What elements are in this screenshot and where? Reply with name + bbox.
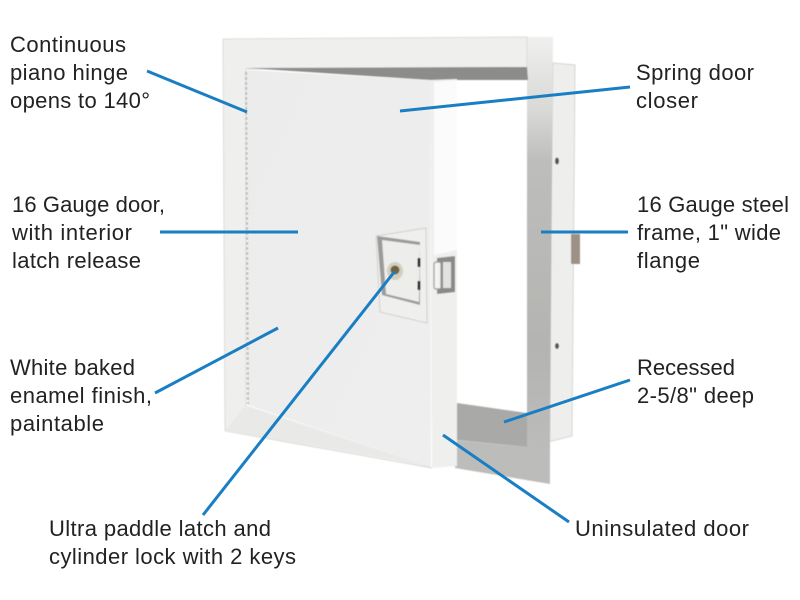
label: hinge: piano hinge <box>10 60 128 85</box>
label: gauge door: 16 Gauge door, <box>12 192 165 217</box>
label: spring closer <box>636 60 754 113</box>
rear flange <box>548 63 575 442</box>
product photo: access door <box>223 37 580 484</box>
steel frame right jamb <box>527 37 553 452</box>
label: enamel finish: White baked <box>10 355 135 380</box>
callout line: hinge <box>147 71 247 112</box>
callout line: enamel finish <box>155 328 278 393</box>
label: hinge <box>10 32 150 113</box>
callout line: spring closer <box>400 87 630 111</box>
label: enamel finish <box>10 355 152 436</box>
label: enamel finish: paintable <box>10 411 104 436</box>
label: gauge door <box>11 192 165 273</box>
piano hinge <box>246 72 248 404</box>
label: hinge: Continuous <box>10 32 126 57</box>
latch hinge marks <box>418 258 420 290</box>
latch plate <box>382 240 420 302</box>
label: gauge door: with interior <box>11 220 132 245</box>
label: gauge frame: flange <box>637 248 700 273</box>
recessed bottom pan <box>455 440 550 484</box>
cylinder lock <box>387 262 403 280</box>
label: paddle latch: cylinder lock with 2 keys <box>49 544 296 569</box>
callout line: recessed <box>504 380 630 422</box>
label: enamel finish: enamel finish, <box>10 383 152 408</box>
label: spring closer: closer <box>636 88 698 113</box>
label: gauge frame <box>637 192 789 273</box>
label: gauge frame: frame, 1" wide <box>637 220 781 245</box>
label: hinge: opens to 140° <box>10 88 150 113</box>
label: uninsulated door: Uninsulated door <box>575 516 749 541</box>
label: recessed <box>637 355 754 408</box>
label: recessed: Recessed <box>637 355 735 380</box>
label: recessed: 2-5/8" deep <box>637 383 754 408</box>
label: paddle latch: Ultra paddle latch and <box>49 516 271 541</box>
frame lower reveal <box>225 406 431 467</box>
paddle latch <box>434 256 455 294</box>
latch housing <box>376 228 427 323</box>
label: paddle latch <box>49 516 296 569</box>
frame tab <box>571 234 580 264</box>
mounting holes <box>555 158 559 349</box>
recessed back wall <box>457 403 527 447</box>
door edge <box>430 79 457 468</box>
label: gauge door: latch release <box>12 248 141 273</box>
label: gauge frame: 16 Gauge steel <box>637 192 789 217</box>
frame face left and top <box>223 37 527 468</box>
label: spring closer: Spring door <box>636 60 754 85</box>
callout line: uninsulated door <box>443 435 569 522</box>
callout line: gauge frame <box>541 230 628 234</box>
callout line: gauge door <box>160 230 298 234</box>
frame top inner shadow <box>246 67 528 80</box>
latch recess <box>377 236 420 305</box>
door face <box>247 70 431 467</box>
callout line: paddle latch <box>203 271 395 515</box>
